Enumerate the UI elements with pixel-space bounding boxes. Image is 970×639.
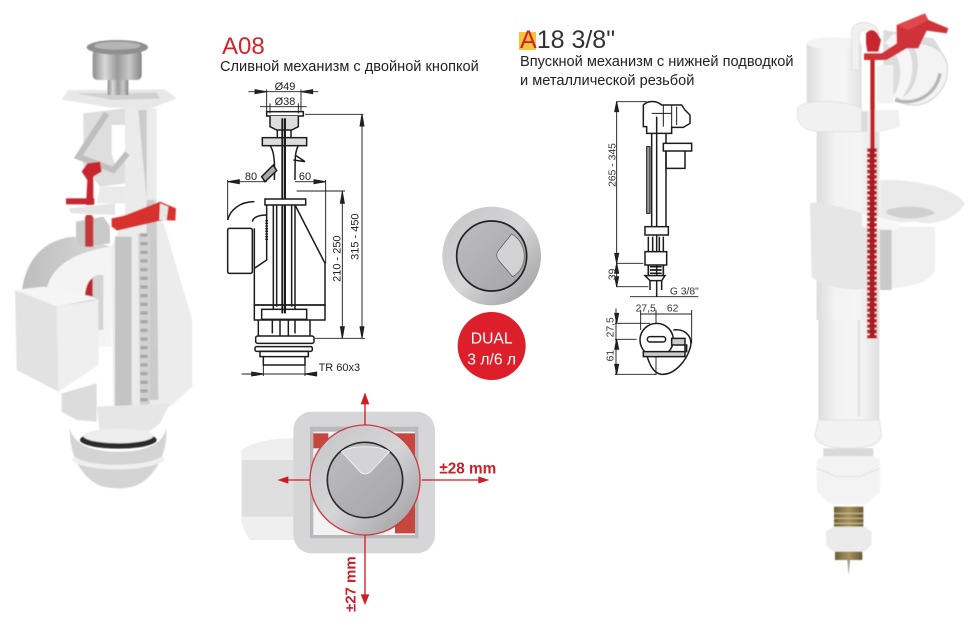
product photo: A08 flush mechanism — [15, 40, 192, 488]
dimension lines — [228, 89, 365, 376]
washer — [826, 527, 872, 552]
technical drawing: A18 — [605, 101, 699, 375]
main tube lower — [818, 313, 879, 423]
white threaded base — [70, 428, 166, 488]
subtitle: A18: Впускной механизм с нижней подводкой — [520, 54, 794, 70]
red lever — [864, 13, 948, 60]
dual flush button and drawing A18 — [442, 101, 699, 380]
badge: DUAL 3 л/6 л — [458, 312, 526, 380]
main column — [112, 108, 158, 407]
upper section in zoom coordinates — [797, 13, 965, 338]
lower frame — [62, 383, 97, 422]
red threaded rod — [870, 57, 875, 338]
base and thread — [254, 305, 325, 320]
dimension labels: 315 - 450 — [350, 213, 362, 260]
subtitle: A08: Сливной механизм с двойной кнопкой — [220, 59, 479, 75]
square frame — [293, 412, 435, 553]
dimension labels: 62 — [667, 304, 679, 315]
heading: A18 3/8": A18 3/8" — [520, 26, 615, 54]
side overflow box — [242, 438, 293, 540]
cap cylinder — [807, 39, 862, 108]
product photo: A18 fill valve — [797, 13, 965, 575]
chrome button — [93, 50, 142, 80]
top view: button with adjustment arrows — [242, 392, 496, 612]
dimension labels: Ø38 — [275, 96, 295, 108]
red hole detail — [85, 275, 103, 330]
central rod — [282, 118, 285, 313]
dimension labels — [245, 81, 362, 374]
red linkage — [66, 162, 102, 247]
badge: DUAL 3 л/6 л: 3 л/6 л — [467, 352, 516, 369]
cross flange and body — [265, 199, 306, 205]
top button and flange — [262, 112, 307, 146]
red parts behind button — [395, 433, 415, 533]
dimension labels: 39 — [607, 268, 618, 280]
collar — [815, 420, 882, 448]
pin — [847, 560, 850, 575]
right wing of mechanism — [147, 200, 192, 407]
round button — [310, 425, 420, 535]
dimension labels: 27,5 — [605, 317, 616, 337]
dimension labels: 265 - 345 — [607, 143, 618, 187]
float cup and tube — [652, 117, 666, 297]
float cup ring — [880, 180, 965, 223]
float cup body — [880, 227, 935, 288]
neck and lever — [270, 146, 298, 180]
collar — [797, 101, 862, 132]
brass thread — [834, 507, 863, 538]
lower nut and thread — [645, 227, 668, 235]
dimension labels: 27,5 — [636, 304, 656, 315]
float rod — [647, 147, 650, 213]
dimension labels: 61 — [605, 350, 616, 361]
technical drawing: A08 dimensions — [228, 81, 365, 376]
main tube upper — [817, 132, 879, 320]
dimension labels: 60 — [299, 171, 311, 183]
label: ±27 mm: ±27 mm — [343, 556, 360, 612]
red bracket — [112, 202, 176, 231]
dimension labels: G 3/8" — [670, 287, 699, 298]
threaded neck — [823, 448, 873, 465]
dimension labels: TR 60x3 — [319, 362, 360, 374]
white spring housing — [68, 203, 115, 215]
dimension labels: 80 — [245, 171, 257, 183]
dimension labels: Ø49 — [275, 81, 295, 93]
rear arc of overflow cup — [22, 237, 112, 330]
black seal — [80, 431, 157, 449]
icon: dual button — [442, 207, 541, 305]
upper lever window — [83, 108, 125, 187]
overflow cup box — [15, 290, 98, 392]
lower section in zoom coordinates — [815, 313, 882, 575]
subtitle second line: A18: и металлической резьбой — [520, 73, 694, 89]
dimension labels: 210 - 250 — [332, 235, 344, 282]
hinge arm — [852, 22, 878, 70]
label: ±28 mm: ±28 mm — [439, 460, 496, 477]
overflow cup — [228, 202, 254, 220]
hex nut — [817, 456, 880, 504]
button stem — [108, 78, 128, 95]
red cap on rod — [866, 30, 881, 52]
yellow highlight — [519, 32, 536, 50]
badge: DUAL 3 л/6 л: DUAL — [471, 330, 513, 347]
knob back and gear — [883, 30, 945, 105]
heading: A08: A08 — [222, 33, 265, 60]
small flush lens — [342, 447, 389, 474]
clip band — [810, 203, 880, 289]
brass end — [835, 552, 862, 560]
dimension lines — [615, 102, 698, 375]
top frame — [62, 89, 177, 110]
dimension labels — [605, 143, 699, 361]
toothed rack — [138, 233, 150, 407]
front arc panel — [45, 247, 112, 347]
arrows — [277, 392, 489, 605]
valve head — [643, 101, 690, 133]
plan view — [647, 330, 691, 374]
